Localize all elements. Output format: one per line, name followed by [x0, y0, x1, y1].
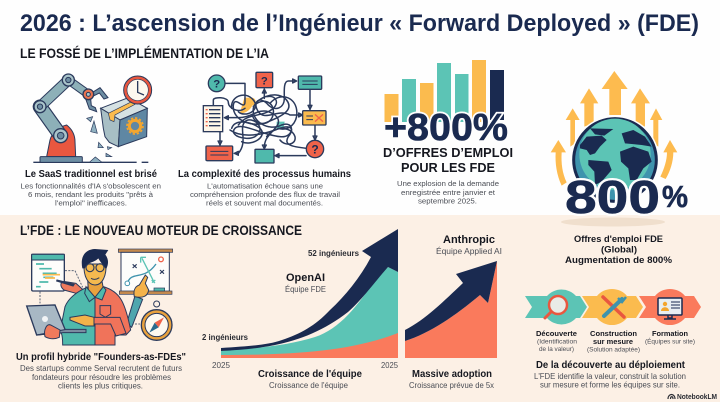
label: découverte: (Identification: [537, 338, 578, 346]
big stat: 800%: [565, 171, 688, 223]
description: SaaS: 6 mois, rendant les produits "prêts à: [28, 190, 154, 199]
icon: globe with rising arrows: [551, 71, 677, 204]
label: construction: sur mesure: [593, 337, 633, 346]
icon: tangled human processes: ?: [261, 75, 268, 87]
description: processus: réels et souvent mal documentés.: [206, 198, 323, 208]
label: Applied AI: Équipe Applied AI: [436, 247, 502, 256]
big stat: 800%: %: [662, 179, 688, 214]
label: end value: 52 ingénieurs: [308, 249, 360, 258]
description: déploiement: sur mesure et forme les équipes sur site.: [540, 380, 680, 390]
description: offres: [397, 179, 499, 206]
big stat: 800%: 800: [565, 171, 660, 223]
heading: processus: La complexité des processus humains: [178, 169, 352, 180]
icon: tangled human processes: [203, 72, 326, 163]
title: 2026 : L’ascension de l’Ingénieur « Forward Deployed » (FDE): [20, 10, 699, 37]
label: formation: Formation: [652, 329, 688, 338]
area chart: Anthropic: [405, 234, 502, 358]
label: construction: [587, 329, 640, 354]
label: formation: [645, 329, 695, 346]
label: construction: (Solution adaptée): [587, 346, 640, 354]
caption: offres globales: Offres d'emploi FDE: [574, 234, 664, 245]
label: start value: 2 ingénieurs: [202, 333, 249, 342]
icon: tangled human processes: ?: [311, 142, 319, 156]
icon: magnifier: [545, 296, 567, 318]
heading: le nouveau moteur: L’FDE : LE NOUVEAU MOTEUR DE CROISSANCE: [20, 223, 302, 238]
icon: robot arm and broken box: [33, 74, 152, 162]
label: Anthropic: Anthropic: [443, 234, 495, 246]
process: découverte: [525, 290, 587, 353]
text block: SaaS traditionnel: [20, 169, 161, 208]
description: processus: L'automatisation échoue sans une: [207, 182, 323, 190]
text block: profil hybride: [16, 352, 186, 390]
label: formation: (Équipes sur site): [645, 338, 695, 346]
big stat: 800%: %: [662, 179, 688, 214]
bar chart: job offers growth: [384, 60, 504, 122]
illustration: hybrid engineer: [27, 249, 173, 345]
label: découverte: [536, 329, 578, 353]
caption: massive adoption: Croissance prévue de 5x: [409, 381, 494, 390]
caption: offres globales: Augmentation de 800%: [565, 255, 672, 266]
description: SaaS: Les fonctionnalités d'IA s'obsolescent en: [20, 182, 161, 190]
description: profil: Des startups comme Serval recrutent de futurs: [20, 364, 182, 373]
label: découverte: de la valeur): [539, 346, 574, 353]
icon: tangled human processes: ?: [213, 78, 220, 90]
heading: offres: [383, 145, 513, 175]
description: offres: enregistrée entre janvier et: [401, 188, 496, 197]
description: processus: compréhension profonde des flux de travail: [190, 190, 340, 199]
label: construction: Construction: [590, 329, 637, 338]
text block: processus humains: [178, 169, 352, 208]
description: déploiement: [534, 372, 686, 390]
text block: offres d'emploi: [383, 145, 513, 206]
label: équipe FDE: Équipe FDE: [285, 285, 326, 294]
icon: wrench and screwdriver: [603, 297, 626, 317]
heading: profil: Un profil hybride "Founders-as-FDEs": [16, 352, 186, 363]
heading: offres: D’OFFRES D’EMPLOI: [383, 145, 513, 160]
description: profil: clients les plus critiques.: [58, 382, 143, 390]
heading: déploiement: De la découverte au déploiement: [536, 360, 686, 371]
description: profil: fondateurs pour résoudre les problèmes: [32, 373, 171, 382]
label: découverte: Découverte: [536, 329, 577, 338]
description: SaaS: l'emploi" inefficaces.: [55, 198, 127, 208]
axis label: end year: 2025: [381, 361, 399, 370]
icon: monitor trainer: [658, 298, 682, 319]
shadow under 800%: [561, 218, 665, 226]
label: OpenAI: OpenAI: [286, 272, 325, 284]
caption: croissance de l'équipe: [258, 369, 362, 390]
axis label: start year: 2025: [212, 361, 231, 370]
caption: croissance de l'équipe: Croissance de l'équipe: [269, 381, 348, 390]
big stat: 800%: 800: [565, 171, 660, 223]
heading: SaaS: Le SaaS traditionnel est brisé: [25, 169, 158, 180]
caption: offres globales: [565, 234, 672, 266]
process: formation: [639, 289, 701, 346]
description: profil: [20, 364, 182, 390]
area chart: OpenAI: [202, 229, 399, 370]
description: offres: septembre 2025.: [418, 196, 477, 206]
description: SaaS: [20, 182, 161, 208]
big stat: +800%: +800%: [384, 107, 508, 149]
heading: le fossé: LE FOSSÉ DE L’IMPLÉMENTATION DE L’IA: [20, 46, 269, 61]
caption: offres globales: (Global): [601, 244, 637, 256]
description: processus: [190, 182, 340, 208]
heading: offres: POUR LES FDE: [401, 160, 495, 175]
caption: croissance de l'équipe: Croissance de l'équipe: [258, 369, 362, 380]
caption: massive adoption: Massive adoption: [412, 369, 492, 380]
caption: massive adoption: [409, 369, 494, 390]
big stat: +800%: +800%: [384, 107, 508, 149]
text block: de la découverte au déploiement: [534, 360, 686, 390]
description: offres: Une explosion de la demande: [397, 179, 499, 188]
process: construction: [582, 289, 643, 354]
description: déploiement: L'FDE identifie la valeur, construit la solution: [534, 372, 686, 381]
